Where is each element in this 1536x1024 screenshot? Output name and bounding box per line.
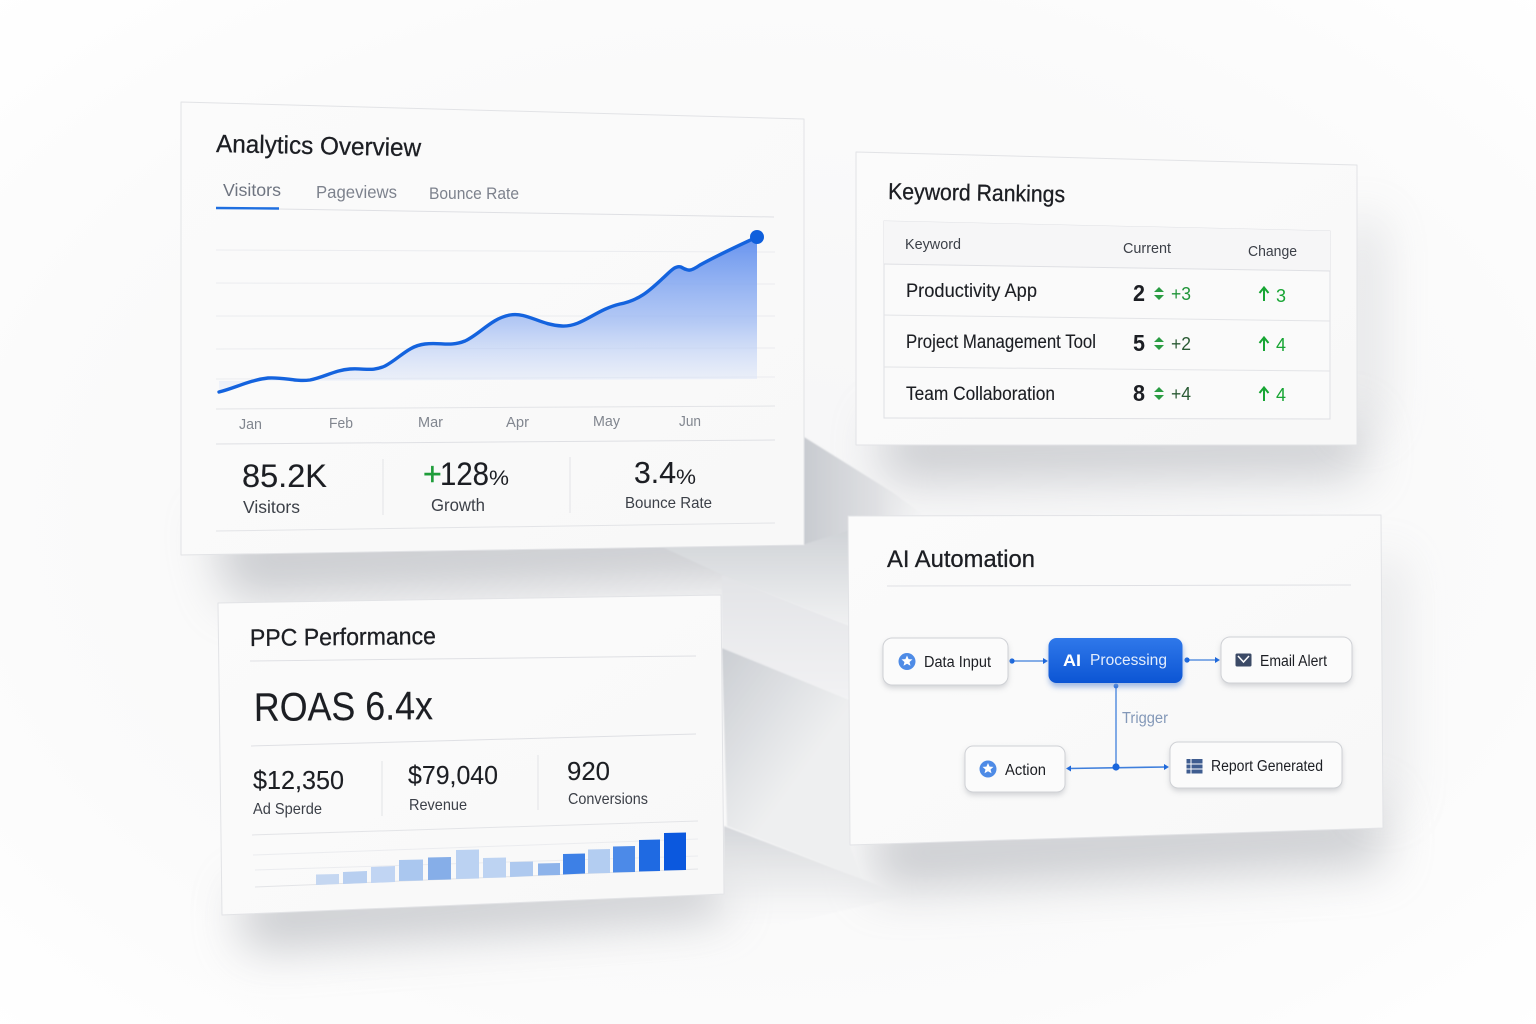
heading: ppc performance: PPC Performance: [250, 623, 436, 652]
row: project management tool: Project Management Tool: [906, 332, 1096, 353]
node: data input: [883, 638, 1008, 688]
stat: revenue: [408, 760, 498, 814]
node: email alert: Email Alert: [1260, 653, 1328, 670]
keyword table: [884, 221, 1330, 419]
node: action: [965, 746, 1065, 795]
node: report generated: Report Generated: [1211, 758, 1323, 775]
stat: growth: +: [423, 456, 442, 492]
month axis labels: Feb: [329, 416, 353, 432]
stat: ad spend: $12,350: [253, 765, 344, 795]
panel: ppc performance: [218, 595, 724, 915]
stat: growth: Growth: [431, 495, 485, 515]
row: project management tool: 4: [1276, 335, 1286, 355]
stat: conversions: Conversions: [568, 791, 648, 808]
stat: ad spend: Ad Sperde: [253, 801, 322, 818]
panel shadows: [210, 220, 1400, 950]
row: productivity app: Productivity App: [906, 281, 1037, 302]
stat: revenue: Revenue: [409, 797, 467, 814]
tabs: Bounce Rate: [429, 185, 519, 203]
icon: action: [980, 760, 996, 778]
row: productivity app: +3: [1171, 284, 1191, 304]
icon: envelope: [1236, 654, 1252, 666]
node: ai processing: [1048, 638, 1183, 687]
row: team collaboration: [906, 380, 1286, 406]
row: project management tool: [906, 330, 1286, 356]
row: team collaboration: 8: [1133, 380, 1145, 406]
heading: keyword rankings: Keyword Rankings: [888, 178, 1065, 207]
table header: Change: [1248, 243, 1297, 260]
node: ai processing: Processing: [1090, 652, 1167, 669]
tabs: Visitors: [223, 180, 281, 200]
line chart: visitors: [216, 230, 775, 409]
stat: visitors: 85.2K: [242, 458, 327, 494]
stat: visitors: [242, 458, 327, 517]
panel: keyword rankings: [856, 152, 1357, 445]
row: productivity app: 2: [1133, 280, 1145, 306]
metric: roas: ROAS 6.4x: [254, 684, 433, 730]
stat: bounce rate: [625, 455, 712, 512]
table header: Keyword: [905, 236, 961, 253]
node: email alert: [1221, 637, 1352, 686]
stat: bounce rate: %: [676, 466, 696, 489]
stat: growth: %: [489, 467, 509, 490]
connectors: [1009, 657, 1220, 772]
row: team collaboration: +4: [1171, 384, 1191, 404]
row: project management tool: 5: [1133, 330, 1145, 356]
node: data input: Data Input: [924, 654, 992, 671]
node: ai processing: AI: [1063, 652, 1081, 670]
panel: ai automation: [848, 515, 1383, 845]
month axis labels: Jun: [679, 414, 701, 430]
stat: growth: [423, 456, 509, 515]
node: report generated: [1170, 742, 1342, 791]
table header: Current: [1123, 240, 1172, 257]
row: productivity app: 3: [1276, 286, 1286, 306]
icon: table: [1186, 759, 1202, 774]
month axis labels: [239, 414, 701, 433]
table header: [905, 236, 1297, 260]
stat: revenue: $79,040: [408, 760, 498, 790]
connecting light wedges: [660, 437, 925, 930]
stat: bounce rate: 3.4: [634, 455, 676, 490]
stat: bounce rate: Bounce Rate: [625, 495, 712, 512]
bar chart: ppc trend: [253, 832, 698, 887]
month axis labels: Jan: [239, 417, 262, 433]
node: action: Action: [1005, 762, 1046, 779]
row: project management tool: +2: [1171, 334, 1191, 354]
tabs: Pageviews: [316, 182, 397, 202]
stat: visitors: Visitors: [243, 497, 300, 517]
row: team collaboration: 4: [1276, 385, 1286, 405]
stat: conversions: [567, 756, 648, 808]
row: productivity app: [906, 280, 1286, 306]
row: team collaboration: Team Collaboration: [906, 384, 1055, 405]
heading: ai automation: AI Automation: [887, 546, 1035, 573]
heading: analytics overview: Analytics Overview: [216, 130, 422, 162]
stat: conversions: 920: [567, 756, 610, 786]
tabs: [216, 180, 774, 217]
panel: analytics overview: [181, 102, 804, 555]
month axis labels: Apr: [506, 415, 529, 431]
icon: data input: [898, 653, 916, 670]
stat: ad spend: [253, 765, 344, 818]
month axis labels: May: [593, 414, 621, 430]
month axis labels: Mar: [418, 415, 443, 431]
connector label: trigger: Trigger: [1122, 710, 1168, 727]
stat: growth: 128: [440, 456, 489, 492]
